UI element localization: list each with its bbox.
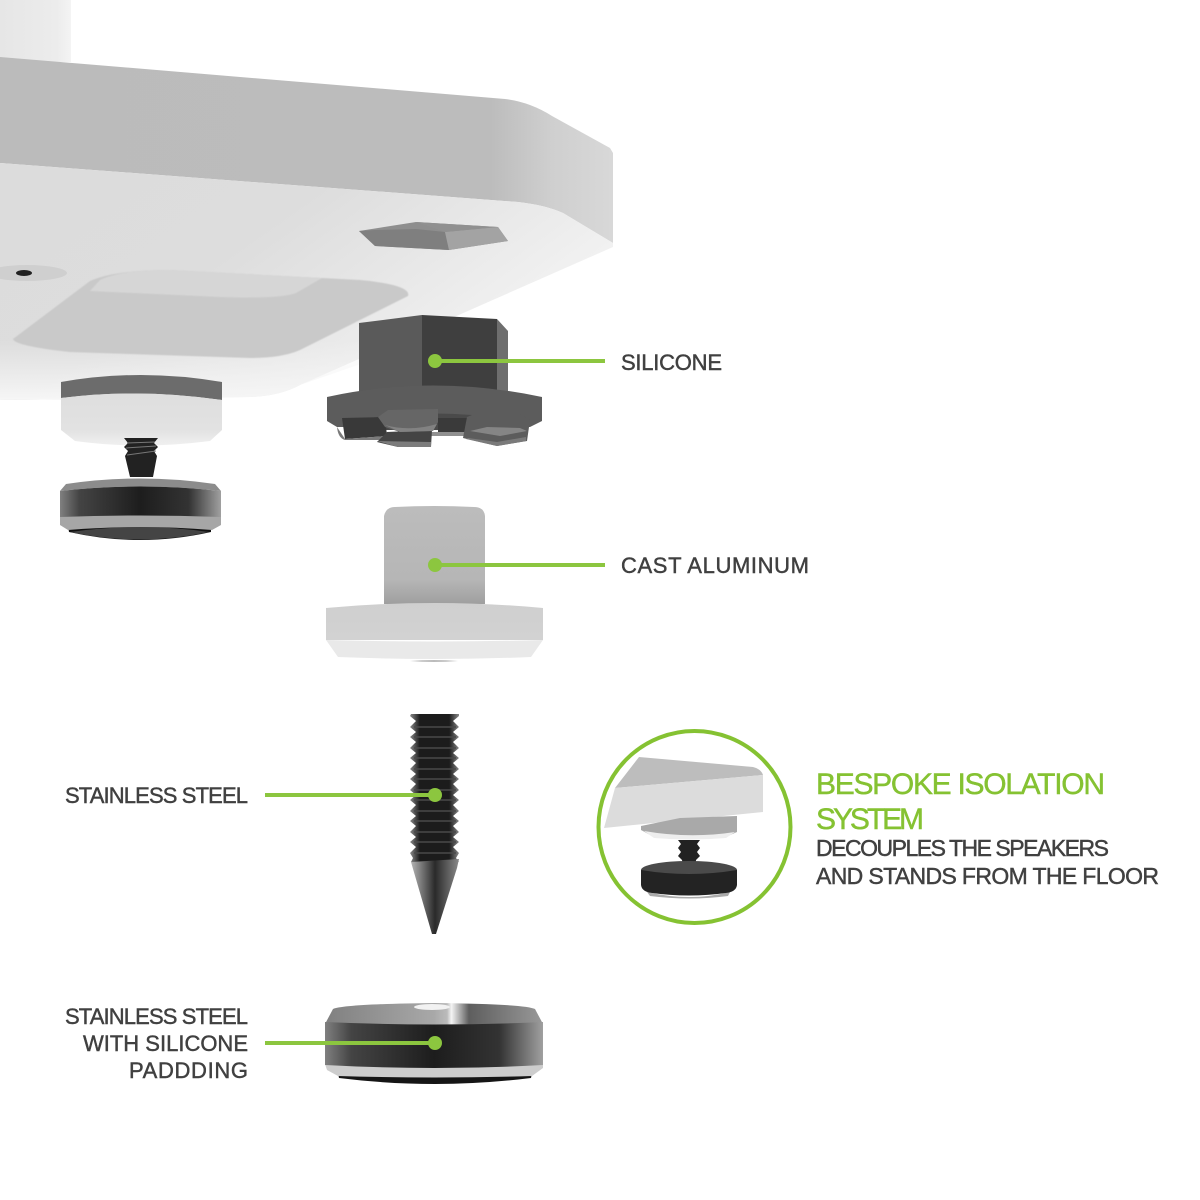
plate front face (604, 775, 763, 828)
stainless steel base disc (325, 1003, 543, 1084)
cast aluminum part (326, 506, 543, 662)
dark silicone ring (61, 375, 222, 400)
lower lip (326, 640, 543, 659)
foot cylinder (641, 816, 737, 838)
leader: stainless steel with silicone (265, 1036, 442, 1050)
aluminum cylinder (61, 393, 222, 446)
thread (410, 714, 459, 862)
flange shadow underside (345, 414, 525, 430)
lower lip (325, 1064, 543, 1078)
hexagon body (359, 315, 508, 394)
silicone pad (338, 1073, 532, 1084)
plate top face (615, 757, 763, 788)
heading: SYSTEM (816, 803, 924, 836)
leader: cast aluminum (428, 558, 605, 572)
label: cast aluminum: CAST ALUMINUM (621, 553, 809, 578)
description (816, 835, 1159, 889)
tab: right (463, 413, 530, 446)
disc side (60, 486, 221, 517)
silicone pad (68, 526, 211, 540)
center highlight (414, 1004, 450, 1010)
lip (60, 514, 221, 530)
underside tabs (337, 409, 530, 447)
underside recess (13, 270, 408, 358)
stand post (0, 0, 71, 62)
description: DECOUPLES THE SPEAKERS (816, 835, 1109, 861)
label: stainless steel with silicone padding: PADDDING (129, 1058, 248, 1083)
tab: center top (378, 409, 438, 432)
tab: center low (377, 430, 432, 447)
center hole (410, 660, 458, 662)
leader: stainless steel (265, 788, 442, 802)
top bevel (325, 1003, 543, 1026)
cone tip (411, 859, 459, 934)
lower disc (641, 861, 737, 898)
description: AND STANDS FROM THE FLOOR (816, 863, 1159, 889)
stand base plate (0, 0, 613, 400)
label: stainless steel with silicone padding: WITH SILICONE (83, 1031, 248, 1056)
heading (816, 768, 1105, 836)
tab: left (342, 417, 387, 439)
green ring (598, 731, 790, 923)
lower disc (60, 478, 221, 540)
threaded spike (124, 438, 158, 477)
cylinder (384, 506, 485, 604)
label: stainless steel: STAINLESS STEEL (65, 783, 248, 808)
label: stainless steel with silicone padding: STAINLESS STEEL (65, 1004, 248, 1029)
flange (327, 386, 542, 427)
label: silicone: SILICONE (621, 350, 722, 375)
disc top bevel (60, 478, 221, 491)
inset: assembled foot in circle (598, 731, 790, 923)
silicone cap part (327, 315, 542, 447)
heading: BESPOKE ISOLATION (816, 768, 1105, 801)
thread highlights (414, 727, 456, 853)
label: stainless steel with silicone padding (65, 1004, 248, 1083)
threaded steel spike (410, 714, 459, 934)
plate underside (0, 163, 613, 400)
underside lower glow (0, 340, 430, 400)
assembled foot (60, 375, 222, 540)
leader: silicone (428, 354, 605, 368)
plate side face (0, 57, 613, 243)
dark side wall (325, 1022, 543, 1068)
spike (678, 840, 700, 872)
tab: middle dark (438, 418, 467, 434)
flange (326, 603, 543, 640)
hexagonal socket (359, 222, 508, 250)
mounting screw (0, 265, 67, 281)
